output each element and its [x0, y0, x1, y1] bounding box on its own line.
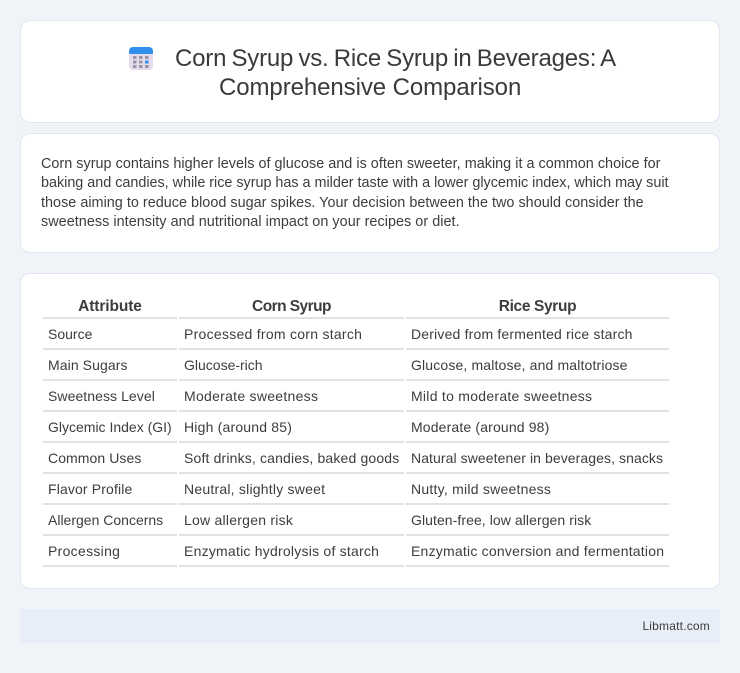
comparison table: Main Sugars — [48, 357, 128, 373]
table card — [20, 273, 720, 589]
comparison table: Low allergen risk — [184, 512, 293, 528]
comparison table: Nutty, mild sweetness — [411, 481, 551, 497]
comparison table: Gluten-free, low allergen risk — [411, 512, 591, 528]
comparison table: Sweetness Level — [48, 388, 155, 404]
title: Comprehensive Comparison — [219, 74, 521, 101]
intro text: sweetness intensity and nutritional impact on your recipes or diet. — [41, 214, 460, 230]
comparison table: Glycemic Index (GI) — [48, 419, 172, 435]
intro text: those aiming to reduce blood sugar spikes. Your decision between the two should consider the — [41, 195, 644, 211]
title: Corn Syrup vs. Rice Syrup in Beverages: A — [175, 45, 616, 72]
footer text: Libmatt.com — [642, 619, 710, 633]
intro card — [20, 133, 720, 253]
comparison table: Processed from corn starch — [184, 326, 362, 342]
comparison table: Natural sweetener in beverages, snacks — [411, 450, 663, 466]
footer — [20, 609, 720, 643]
comparison table: Moderate sweetness — [184, 388, 318, 404]
comparison table: Allergen Concerns — [48, 512, 163, 528]
comparison table: Moderate (around 98) — [411, 419, 549, 435]
intro text: Corn syrup contains higher levels of glucose and is often sweeter, making it a common choice for — [41, 156, 660, 172]
comparison table: Soft drinks, candies, baked goods — [184, 450, 399, 466]
comparison table: Neutral, slightly sweet — [184, 481, 325, 497]
comparison table: High (around 85) — [184, 419, 292, 435]
comparison table: Enzymatic conversion and fermentation — [411, 543, 664, 559]
intro text — [41, 156, 668, 230]
comparison table: Common Uses — [48, 450, 141, 466]
icon: calendar — [129, 47, 153, 70]
comparison table: Attribute — [78, 298, 142, 315]
comparison table: Processing — [48, 543, 120, 559]
comparison table: Derived from fermented rice starch — [411, 326, 633, 342]
comparison table: Source — [48, 326, 92, 342]
title — [175, 45, 616, 101]
title card — [20, 20, 720, 123]
comparison table: Corn Syrup — [252, 298, 331, 315]
comparison table: Glucose, maltose, and maltotriose — [411, 357, 628, 373]
comparison table: Rice Syrup — [499, 298, 576, 315]
comparison table: Enzymatic hydrolysis of starch — [184, 543, 379, 559]
comparison table: Mild to moderate sweetness — [411, 388, 592, 404]
comparison table: Flavor Profile — [48, 481, 132, 497]
intro text: baking and candies, while rice syrup has a milder taste with a lower glycemic index, which may suit — [41, 175, 668, 191]
comparison table: Glucose-rich — [184, 357, 263, 373]
